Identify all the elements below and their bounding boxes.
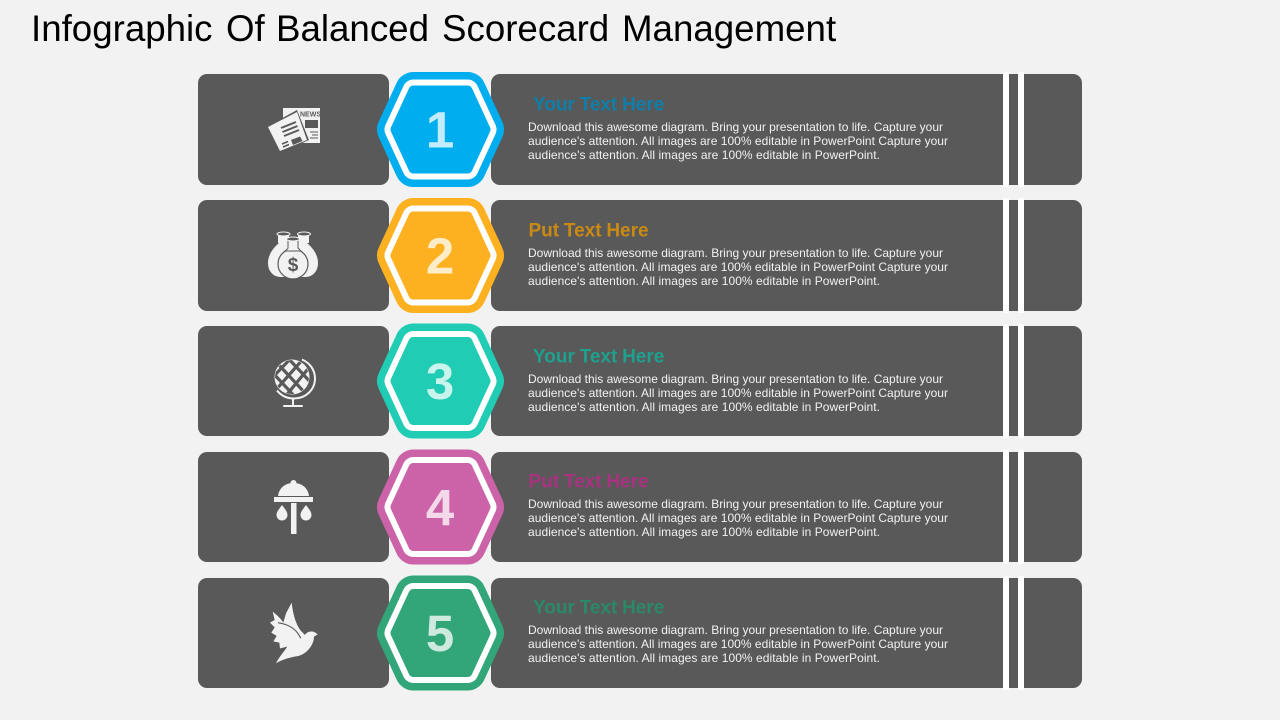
icon: newspapers xyxy=(266,108,321,153)
body text 5: audience's attention. All images are 100% editable in PowerPoint Capture your xyxy=(528,637,948,651)
heading 3: Your Text Here xyxy=(533,346,664,368)
left icon card 2 xyxy=(198,200,389,311)
left icon card 4 xyxy=(198,452,389,562)
body text 4: Download this awesome diagram. Bring your presentation to life. Capture your xyxy=(528,497,943,511)
number badge 4: 4 xyxy=(426,479,455,536)
panel: row 5 xyxy=(198,576,1082,690)
title: Infographic xyxy=(31,8,213,49)
body text 1: audience's attention. All images are 100% editable in PowerPoint Capture your xyxy=(528,134,948,148)
body text 4: audience's attention. All images are 100% editable in PowerPoint. xyxy=(528,525,880,539)
body text 3 xyxy=(528,372,948,414)
body text 2: audience's attention. All images are 100% editable in PowerPoint Capture your xyxy=(528,260,948,274)
body text 3: audience's attention. All images are 100% editable in PowerPoint Capture your xyxy=(528,386,948,400)
panel: row 1 xyxy=(198,72,1082,187)
icon: dove xyxy=(270,603,318,663)
body text 3: Download this awesome diagram. Bring your presentation to life. Capture your xyxy=(528,372,943,386)
panel: row 4 xyxy=(198,450,1082,564)
text card 5 xyxy=(491,576,1082,690)
heading 5: Your Text Here xyxy=(533,598,664,618)
icon: newspapers: NEWS xyxy=(300,112,321,118)
panel: row 3 xyxy=(198,324,1082,438)
icon: money bags xyxy=(268,232,318,279)
text card 2 xyxy=(491,198,1082,313)
text card 1 xyxy=(491,72,1082,187)
heading 4: Put Text Here xyxy=(528,472,649,492)
number badge 2 xyxy=(396,216,486,294)
title: Management xyxy=(622,8,836,49)
icon: money bags: $ xyxy=(288,255,299,276)
body text 1: audience's attention. All images are 100% editable in PowerPoint. xyxy=(528,148,880,162)
number badge 5: 5 xyxy=(426,605,454,662)
body text 5 xyxy=(528,623,948,665)
body text 5: audience's attention. All images are 100% editable in PowerPoint. xyxy=(528,651,880,665)
body text 3: audience's attention. All images are 100% editable in PowerPoint. xyxy=(528,400,880,414)
icon: globe xyxy=(274,358,316,407)
text card 4 xyxy=(491,450,1082,564)
text card 3 xyxy=(491,324,1082,438)
number badge 2: 2 xyxy=(426,228,454,284)
number badge 1: 1 xyxy=(426,102,454,158)
panel: row 2 xyxy=(198,198,1082,313)
body text 1 xyxy=(528,120,948,162)
left icon card 3 xyxy=(198,326,389,436)
body text 2: audience's attention. All images are 100% editable in PowerPoint. xyxy=(528,274,880,288)
title: Of xyxy=(226,8,266,49)
title: Scorecard xyxy=(442,8,609,49)
icon: shower with drops xyxy=(274,480,313,534)
body text 4 xyxy=(528,497,948,539)
body text 4: audience's attention. All images are 100% editable in PowerPoint Capture your xyxy=(528,511,948,525)
number badge 5 xyxy=(396,594,486,672)
left icon card 5 xyxy=(198,578,389,688)
number badge 3 xyxy=(396,342,486,420)
body text 2: Download this awesome diagram. Bring your presentation to life. Capture your xyxy=(528,246,943,260)
body text 1: Download this awesome diagram. Bring your presentation to life. Capture your xyxy=(528,120,943,134)
heading 2: Put Text Here xyxy=(528,220,649,242)
left icon card 1 xyxy=(198,74,389,185)
body text 2 xyxy=(528,246,948,288)
heading 1: Your Text Here xyxy=(533,94,664,116)
number badge 4 xyxy=(396,468,486,546)
number badge 1 xyxy=(396,90,486,168)
title: Balanced xyxy=(276,8,429,49)
body text 5: Download this awesome diagram. Bring your presentation to life. Capture your xyxy=(528,623,943,637)
number badge 3: 3 xyxy=(426,353,454,410)
